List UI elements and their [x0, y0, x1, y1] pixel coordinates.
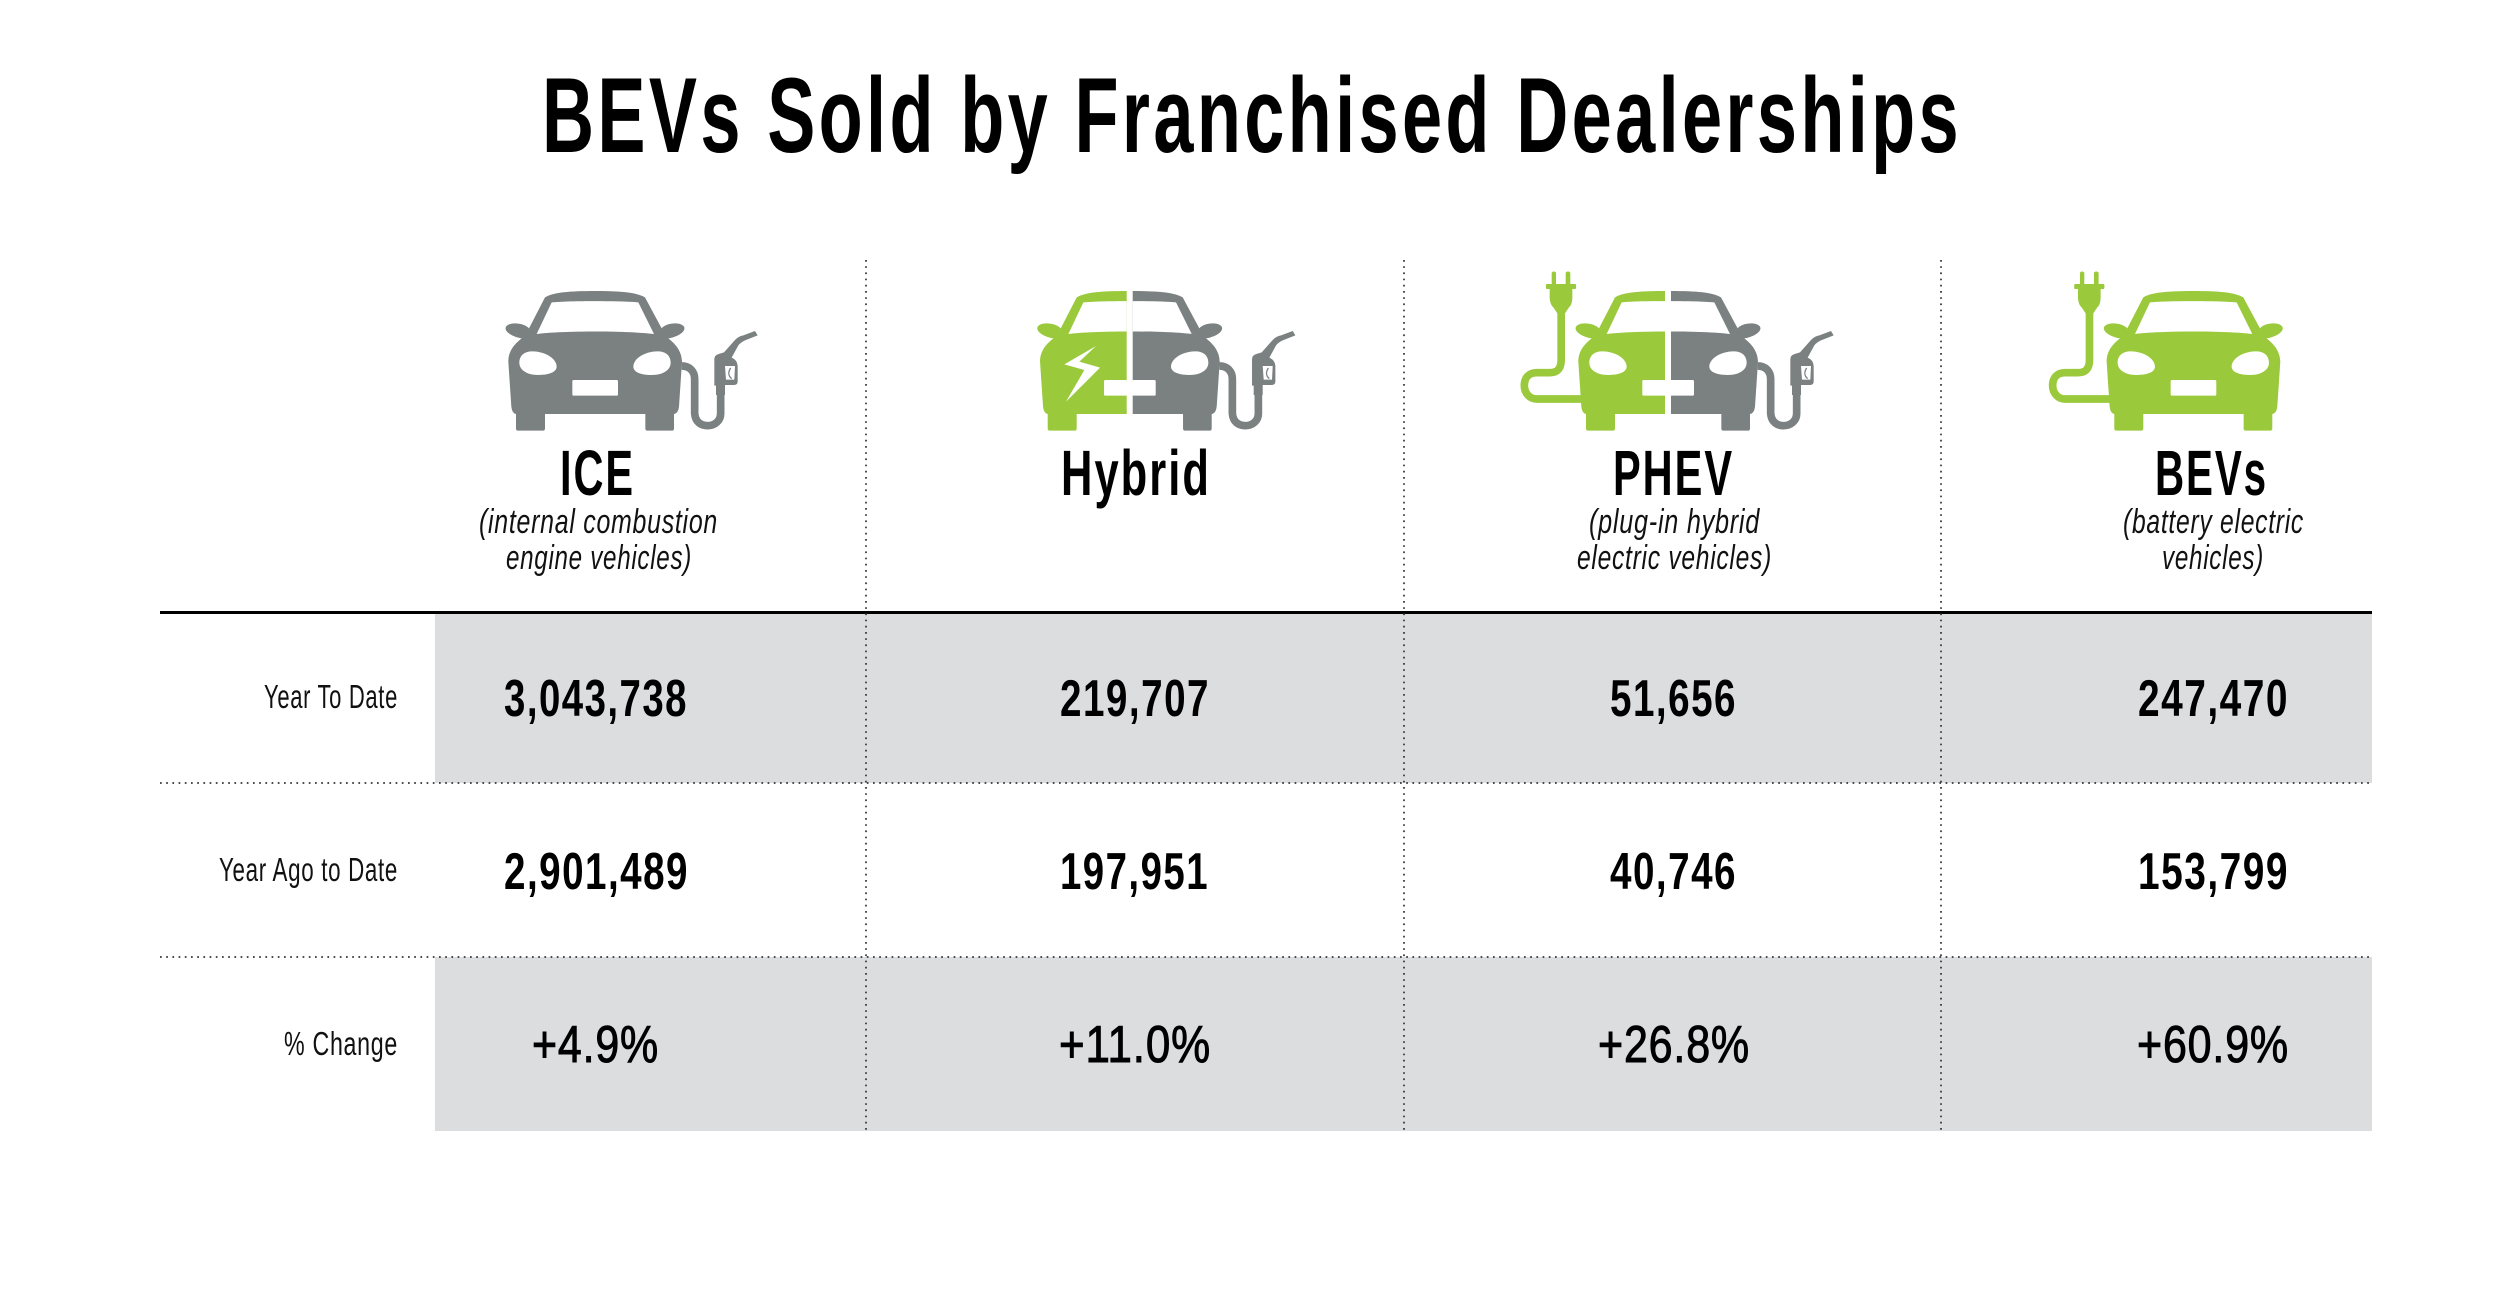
- column heading: PHEV: [1577, 437, 1772, 577]
- icon: hybrid car with bolt and fuel pump: [1037, 291, 1295, 431]
- column heading: ICE: [479, 437, 718, 577]
- icon: PHEV car with plug and fuel pump: [1524, 271, 1834, 431]
- column heading: PHEV: (plug-in hybrid: [1589, 503, 1760, 541]
- column heading: PHEV: PHEV: [1613, 437, 1734, 509]
- row values: Year To Date: 3,043,738: [504, 670, 688, 728]
- row label: % Change: % Change: [284, 1025, 398, 1062]
- row values: % Change: +26.8%: [1598, 1016, 1750, 1074]
- table grid lines: [160, 260, 2372, 1131]
- column heading: BEVs: [2123, 437, 2304, 577]
- row values: Year Ago to Date: 40,746: [1610, 843, 1737, 901]
- column heading: ICE: (internal combustion: [479, 503, 718, 541]
- row values: Year Ago to Date: 153,799: [2138, 843, 2289, 901]
- icon: BEV car with plug: [2053, 271, 2283, 431]
- row values: Year Ago to Date: 197,951: [1060, 843, 1209, 901]
- row values: Year Ago to Date: [504, 843, 2289, 901]
- row values: % Change: +60.9%: [2137, 1016, 2289, 1074]
- column heading: BEVs: vehicles): [2162, 539, 2264, 577]
- row values: Year To Date: 219,707: [1060, 670, 1210, 728]
- table shaded rows: [435, 613, 2372, 1131]
- row values: Year To Date: 51,656: [1610, 670, 1737, 728]
- column heading: BEVs: BEVs: [2155, 437, 2268, 509]
- row values: Year To Date: [504, 670, 2289, 728]
- column heading: BEVs: (battery electric: [2123, 503, 2304, 541]
- column heading: Hybrid: Hybrid: [1061, 437, 1211, 509]
- row label: Year To Date: Year To Date: [264, 678, 398, 715]
- row label: Year Ago to Date: Year Ago to Date: [219, 851, 398, 888]
- icon: ICE car with fuel pump: [506, 291, 758, 431]
- row values: Year Ago to Date: 2,901,489: [504, 843, 689, 901]
- row values: Year To Date: 247,470: [2138, 670, 2289, 728]
- row values: % Change: +4.9%: [532, 1016, 659, 1074]
- row values: % Change: +11.0%: [1059, 1016, 1211, 1074]
- row values: % Change: [532, 1016, 2289, 1074]
- column heading: ICE: ICE: [560, 437, 635, 509]
- column heading: PHEV: electric vehicles): [1577, 539, 1772, 577]
- column heading: ICE: engine vehicles): [506, 539, 692, 577]
